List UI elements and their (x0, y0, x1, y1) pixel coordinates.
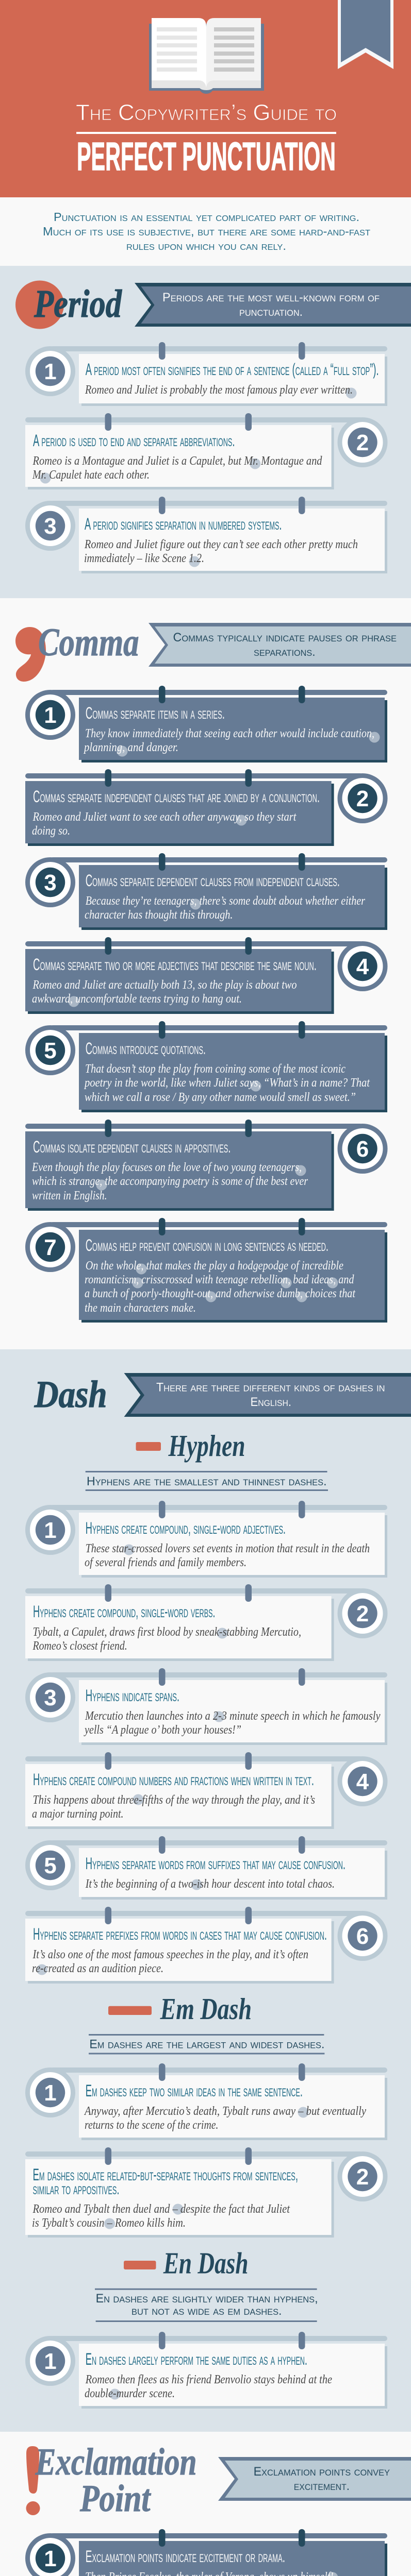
number badge (25, 346, 75, 396)
number badge: 1 (44, 2349, 57, 2374)
banner: exclamation description: Exclamation points convey (254, 2465, 390, 2479)
example: written in English. (32, 1189, 107, 1202)
item: period 1 (25, 342, 387, 406)
highlights (96, 1165, 306, 1190)
hyphen description (86, 1471, 328, 1491)
banner: period description: Periods are the most well-known form of (162, 291, 380, 304)
icon: exclamation mark (26, 2446, 40, 2515)
number badge (25, 1672, 75, 1722)
banner: comma description: separations. (254, 645, 316, 659)
rule text (33, 2165, 298, 2198)
item: comma 5 (25, 1021, 387, 1112)
example: character has thought this through. (85, 908, 233, 922)
heading: Exclamation Point (35, 2441, 197, 2520)
number badge (25, 2336, 75, 2386)
highlight (109, 2388, 120, 2400)
item: exclamation 1 (25, 2529, 387, 2576)
panel: dash section (0, 1349, 411, 2432)
example (85, 1259, 356, 1315)
en dash description: but not as wide as em dashes. (131, 2304, 282, 2318)
number badge: 2 (356, 1601, 369, 1626)
rule text: Commas introduce quotations. (86, 1039, 206, 1058)
icon: period dot (15, 280, 64, 329)
number badge (337, 2151, 388, 2201)
example: immediately – like Scene 1.2. (84, 552, 204, 565)
example: a bunch of poorly-thought-out, and otherwise dumb, choices that (85, 1287, 356, 1300)
example (85, 1542, 370, 1569)
example: Romeo’s closest friend. (32, 1639, 127, 1653)
panel: period section (0, 266, 411, 598)
icon: bookmark ribbon (338, 0, 393, 69)
item: hyphen 3 (25, 1668, 387, 1745)
example: poetry in the world, like when Juliet says, “What’s in a name? That (84, 1076, 370, 1090)
example: yells “A plague o’ both your houses!” (84, 1723, 241, 1737)
subsection heading: Em Dash (108, 1992, 252, 2026)
banner: dash description: There are three different kinds of dashes in (156, 1381, 385, 1395)
banner: comma description (149, 623, 411, 667)
highlight (298, 2107, 308, 2117)
example (85, 894, 366, 922)
panel: header (0, 0, 411, 197)
highlights (40, 459, 260, 483)
number badge (25, 1222, 75, 1272)
highlight (327, 2572, 338, 2576)
example: Romeo and Juliet is probably the most famous play ever written. (85, 383, 353, 397)
example (32, 2202, 290, 2230)
number badge: 4 (356, 1769, 369, 1794)
example: planning, and danger. (83, 741, 178, 754)
highlight (189, 556, 200, 567)
number badge: 5 (44, 1853, 57, 1878)
subsection heading: En Dash (124, 2246, 249, 2280)
highlight (190, 899, 201, 910)
number badge (25, 2533, 75, 2576)
number badge: 2 (356, 2164, 369, 2190)
intro text: Much of its use is subjective, but there are some hard-and-fast (43, 225, 370, 238)
intro text: Punctuation is an essential yet complicated part of writing. (54, 210, 359, 224)
item: em dash 2 (25, 2147, 388, 2238)
item: en dash 1 (25, 2332, 387, 2409)
rule text: similar to appositives. (33, 2179, 120, 2198)
number badge (337, 1756, 388, 1806)
example (83, 727, 374, 754)
item: comma 2 (25, 769, 388, 846)
highlight (37, 1964, 47, 1975)
example: is Tybalt’s cousin – Romeo kills him. (32, 2216, 186, 2230)
example: Romeo and Tybalt then duel and – despite the fact that Juliet (32, 2202, 290, 2216)
highlights (132, 1263, 338, 1302)
example: returns to the scene of the crime. (85, 2119, 219, 2132)
example: Romeo and Juliet figure out they can’t see each other pretty much (84, 538, 358, 551)
banner: exclamation description (218, 2457, 411, 2501)
intro text: rules upon which you can rely. (126, 239, 286, 252)
number badge: 6 (356, 1924, 369, 1949)
number badge (25, 690, 75, 740)
item: comma 1 (25, 686, 387, 762)
rule text: Commas isolate dependent clauses in appositives. (33, 1138, 231, 1156)
number badge (337, 417, 388, 467)
example: On the whole, that makes the play a hodgepodge of incredible (86, 1259, 343, 1273)
example (32, 1793, 315, 1821)
example (32, 454, 322, 482)
example: Mr. Capulet hate each other. (32, 468, 150, 482)
example: It’s also one of the most famous speeches in the play, and it’s often (32, 1948, 308, 1961)
heading: Exclamation Point: Point (79, 2478, 152, 2520)
number badge (337, 1911, 388, 1961)
example (32, 1948, 308, 1975)
number badge: 3 (44, 870, 57, 895)
number badge: 3 (44, 514, 57, 539)
example: re-created as an audition piece. (32, 1962, 163, 1975)
highlight (251, 1081, 261, 1091)
number badge (337, 1124, 388, 1174)
item: hyphen 6 (25, 1907, 388, 1984)
example (84, 538, 358, 565)
heading: Period: Period (34, 282, 122, 326)
banner: period description (135, 283, 411, 327)
example: awkward, uncomfortable teens trying to hang out. (32, 992, 242, 1006)
example (84, 1709, 381, 1737)
highlights (117, 732, 380, 756)
highlight (68, 996, 79, 1007)
highlight (124, 1545, 134, 1555)
example (85, 2373, 332, 2400)
example (84, 1062, 370, 1104)
rule text: Hyphens indicate spans. (86, 1686, 179, 1705)
number badge (25, 2067, 75, 2117)
subsection heading: Hyphen: Hyphen (168, 1429, 245, 1463)
item: comma 3 (25, 853, 387, 930)
item: period 2 (25, 413, 388, 489)
heading: Dash: Dash (34, 1374, 107, 1416)
banner: dash description: English. (251, 1395, 291, 1409)
rule text: A period is used to end and separate abbreviations. (33, 431, 235, 450)
example: Because they’re teenagers, there’s some doubt about whether either (86, 894, 366, 908)
example: It’s the beginning of a two-ish hour descent into total chaos. (85, 1877, 335, 1891)
example (84, 2105, 366, 2132)
banner: period description: punctuation. (239, 305, 303, 319)
number badge: 5 (44, 1038, 57, 1063)
panel: intro (0, 197, 411, 266)
example: Even though the play focuses on the love of two young teenagers, (31, 1161, 302, 1174)
example: Romeo and Juliet are actually both 13, so the play is about two (32, 978, 297, 992)
number badge: 6 (356, 1137, 369, 1162)
banner: exclamation description: excitement. (294, 2479, 350, 2493)
number badge: 1 (44, 2546, 57, 2571)
number badge: 7 (44, 1235, 57, 1260)
en dash description (95, 2289, 318, 2322)
example (32, 810, 297, 838)
icon: open book (149, 18, 264, 94)
subsection heading: En Dash: En Dash (163, 2246, 249, 2280)
example (32, 978, 297, 1006)
heading: Comma: Comma (38, 621, 139, 664)
em dash description (89, 2034, 324, 2055)
example (32, 1625, 301, 1653)
rule text: Commas separate items in a series. (86, 704, 225, 722)
example: which we call a rose / By any other name would smell as sweet.” (85, 1091, 356, 1104)
item: comma 4 (25, 937, 388, 1014)
number badge: 3 (44, 1685, 57, 1710)
banner: comma description: Commas typically indicate pauses or phrase (173, 631, 397, 645)
item: hyphen 2 (25, 1584, 388, 1661)
example: which is strange, the accompanying poetry is some of the best ever (32, 1175, 308, 1188)
highlights (104, 2204, 184, 2229)
highlight (346, 387, 357, 399)
heading: Exclamation Point: Exclamation (35, 2441, 197, 2483)
example: a major turning point. (32, 1807, 124, 1821)
hyphen description: Hyphens are the smallest and thinnest dashes. (87, 1475, 327, 1488)
number badge: 2 (356, 786, 369, 811)
number badge: 4 (356, 954, 369, 979)
subsection heading: Em Dash: Em Dash (160, 1992, 252, 2026)
example: Romeo then flees as his friend Benvolio stays behind at the (85, 2373, 332, 2386)
example: romanticism, crisscrossed with teenage rebellion, bad ideas, and (85, 1273, 354, 1286)
number badge: 1 (44, 359, 57, 384)
example: doing so. (32, 824, 70, 838)
number badge (25, 857, 75, 907)
number badge (337, 941, 388, 991)
example: of several friends and family members. (85, 1556, 246, 1569)
number badge: 2 (356, 430, 369, 455)
rule text: Hyphens create compound, single-word verbs. (33, 1602, 216, 1621)
number badge (25, 501, 75, 551)
item: em dash 1 (25, 2063, 387, 2140)
example (31, 1161, 308, 1202)
example: This happens about three-fifths of the way through the play, and it’s (33, 1793, 315, 1807)
example: Romeo and Juliet want to see each other anyway, so they start (32, 810, 297, 824)
banner: dash description (124, 1373, 411, 1417)
en dash description: En dashes are slightly wider than hyphens, (96, 2292, 318, 2306)
item: period 3 (25, 497, 387, 573)
panel: exclamation section (0, 2432, 411, 2576)
number badge: 1 (44, 2080, 57, 2106)
number badge: 1 (44, 703, 57, 728)
number badge (25, 1505, 75, 1555)
highlight (133, 1794, 143, 1805)
highlight (213, 1711, 224, 1722)
item: hyphen 4 (25, 1752, 388, 1829)
panel: comma section (0, 598, 411, 1349)
highlight (191, 1879, 202, 1890)
example: the main characters make. (85, 1301, 196, 1315)
highlight (236, 815, 246, 825)
icon: comma (15, 627, 46, 682)
em dash description: Em dashes are the largest and widest dashes. (89, 2038, 324, 2052)
number badge: 1 (44, 1518, 57, 1543)
example: That doesn’t stop the play from coining some of the most iconic (85, 1062, 346, 1076)
item: hyphen 5 (25, 1836, 387, 1900)
subsection heading: Hyphen (136, 1429, 245, 1463)
example: Romeo is a Montague and Juliet is a Capulet, but Mr. Montague and (32, 454, 322, 468)
intro text (43, 210, 370, 252)
title: line one: The Copywriter’s Guide to (76, 100, 337, 125)
number badge (337, 773, 388, 823)
example: Tybalt, a Capulet, draws first blood by sneak-stabbing Mercutio, (33, 1625, 301, 1639)
number badge (25, 1840, 75, 1890)
example: double-murder scene. (85, 2387, 175, 2400)
item: hyphen 1 (25, 1501, 387, 1578)
highlight (217, 1628, 228, 1638)
number badge (25, 1025, 75, 1075)
example: Anyway, after Mercutio’s death, Tybalt runs away – but eventually (84, 2105, 366, 2118)
item: comma 6 (25, 1120, 388, 1211)
item: comma 7 (25, 1218, 387, 1323)
number badge (337, 1588, 388, 1638)
